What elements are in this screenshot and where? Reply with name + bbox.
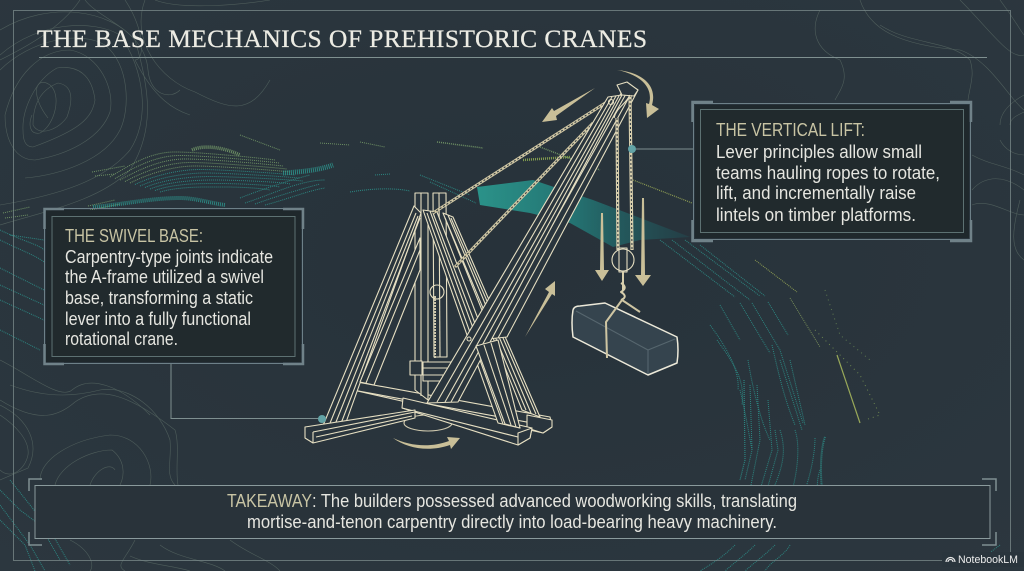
pulley and rope falls (612, 95, 634, 300)
arrow: upward thrust (525, 281, 555, 337)
takeaway panel: : The builders possessed advanced woodworking skills, translating (312, 490, 797, 511)
callout: swivel base: rotational crane. (65, 328, 178, 349)
lidar terrain scan (0, 135, 1000, 571)
lidar: teal contour lines (0, 165, 1000, 571)
jib beams (427, 82, 638, 403)
callout: swivel base: Carpentry-type joints indicate (65, 246, 273, 267)
takeaway panel (29, 479, 996, 545)
left leg (322, 206, 421, 428)
front crossing feet (476, 340, 520, 428)
callout: swivel base: base, transforming a static (65, 287, 253, 308)
watermark: NotebookLM (942, 552, 1024, 567)
callout: vertical lift (628, 102, 971, 241)
rear legs (423, 210, 540, 428)
lidar: teal block (477, 180, 690, 247)
arrow: stay pull (542, 88, 595, 122)
arrow: lift right (635, 198, 651, 286)
stone lintel (572, 300, 678, 375)
arrow: swivel rotation (393, 437, 460, 449)
callout: swivel base (44, 208, 326, 423)
callout: swivel base: lever into a fully functional (65, 308, 251, 329)
callout: vertical lift: lift, and incrementally raise (716, 182, 916, 203)
title: THE BASE MECHANICS OF PREHISTORIC CRANES (37, 24, 647, 53)
crane diagram (305, 82, 678, 445)
stay ropes (433, 100, 610, 267)
rear posts (410, 193, 451, 400)
takeaway panel: TAKEAWAY (227, 490, 312, 511)
turntable (404, 415, 452, 431)
callout: vertical lift: Lever principles allow small (716, 141, 922, 162)
arrow: rotation top (617, 70, 659, 118)
watermark: NotebookLM: NotebookLM (958, 554, 1018, 566)
motion arrows (393, 70, 659, 449)
arrow: lift left (595, 213, 609, 281)
callout: swivel base: THE SWIVEL BASE: (65, 225, 203, 246)
callout: vertical lift: THE VERTICAL LIFT: (716, 119, 865, 140)
lidar: green ridge (3, 135, 880, 423)
front base beam (305, 410, 415, 443)
callout: swivel base: the A-frame utilized a swivel (65, 266, 264, 287)
takeaway panel: mortise-and-tenon carpentry directly into load-bearing heavy machinery. (247, 511, 777, 532)
base beams (353, 382, 552, 445)
callout: vertical lift: lintels on timber platforms. (716, 204, 916, 225)
callout: vertical lift: teams hauling ropes to rotate, (716, 162, 940, 183)
anchor dot: swivel (318, 415, 326, 423)
anchor dot: lift (628, 145, 636, 153)
